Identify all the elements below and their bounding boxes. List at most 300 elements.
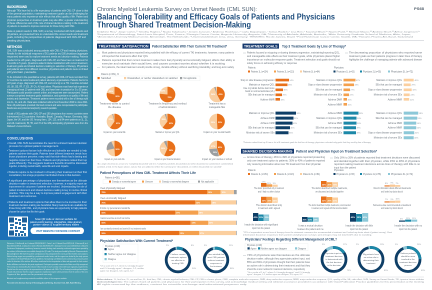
bar chart: patients 1L goals (241, 79, 294, 101)
column chart: described only one and agreed: The doctor described only (256, 204, 283, 207)
legend: physician feelings: Neither agree nor disagree (261, 247, 288, 250)
legend: physicians shared: Physicians 3L (n=72) (391, 173, 413, 176)
text block: goals bullets: treatment goals as their patients progress in later lines of therapy (349, 54, 423, 58)
footnote: physician satisfaction: and 7="strongly agree": disagree, 1-2; neither (100, 267, 144, 270)
column chart: someone else recommended: 7% (385, 199, 388, 201)
section header: treatment goals: TREATMENT GOALS (244, 44, 278, 48)
stacked bar: emotionally fatigued: 70% (102, 202, 106, 204)
bar chart: patients 2L goals: SEs that can be managed (316, 89, 343, 92)
column chart: asked my doctor (373, 183, 412, 193)
donut: patients role: My patients have (363, 253, 380, 256)
bar chart: physicians 2L goals: SEs that can be managed (316, 127, 343, 130)
bar chart: physicians 3L goals: Maintain or improve QOL (376, 112, 403, 115)
donut: patients role (356, 244, 388, 273)
donut: patients should be more involved (395, 244, 425, 273)
section header: shared decision-making: Patient and Physician Input on Treatment Selection* (296, 149, 378, 153)
bar chart: physicians 3L goals: Stop or slow disease progression (368, 132, 403, 135)
text block: physician feelings bullet: 74% of physicians saw themselves as the ultimate (247, 253, 311, 257)
column chart: decided together: we discussed and decided together (316, 190, 344, 193)
stacked bar: physically fatigued: I feel physically fatigued (100, 187, 126, 190)
legend: physicians shared (334, 169, 413, 176)
text block: references: Reused with permission from the congress organizers; reproduction requires written permission from the authors of this work. (7, 271, 88, 274)
text block: methods: ≥18 years of age, diagnosed with CML-CP, and currently on a TKI. Countries included (7, 81, 88, 85)
text block: conclusions: goals differently. This suggests treatment benefits should be discussed (9, 161, 87, 165)
text block: references: Author affiliations are listed on the poster supplement. Participants provided consent and all data were fully anonymized. (7, 263, 88, 266)
text block: authors: ¹Department of Hematology, Saint-Louis Hospital, Paris, France; ²Georgia Cancer Center, Augusta University, Augusta, GA; ³University of Adelaide, Adelaide, Australia; ⁴Akita University Graduate School of Medicine, Akita, Japan; (97, 33, 412, 36)
text block: conclusions: decision-maker in treatment selection; however, a majority report an (9, 182, 87, 186)
bar chart: patients 2L goals: 43% (354, 85, 359, 87)
bar chart: patients 2L goals (308, 79, 360, 106)
column chart: only one treatment presented: 11% (267, 183, 271, 185)
donut: patients role: treatment (367, 262, 376, 265)
column chart: no input from patient: I made the decision with no (394, 225, 423, 228)
pie chart: manageable side effects: 54% (211, 93, 215, 96)
legend: physician feelings: Physicians (n=180) (247, 244, 262, 247)
stacked bar: personal and social life: 17% (176, 212, 180, 214)
panel: treatment goals (241, 44, 423, 144)
bar chart: physicians 1L goals (246, 112, 301, 135)
column chart: mutual decision (298, 217, 324, 231)
legend: satisfaction: Satisfied (101, 77, 112, 80)
footer: abbreviations: Abbreviations: 1L, first line; 2L, second line; 3L, third line; CML, chronic myeloid leukemia; CML-CP, CML in chronic phase; CMR, complete molecular response; DMR, deep molecular response; MMR, major molecular response; QOL, quality of life; SE, side effect; SUN, Survey on Unmet Needs; TKI, tyrosine kinase inhibitor (97, 278, 424, 281)
footer: abbreviations (97, 277, 425, 286)
legend: physician satisfaction: Disagree (108, 258, 117, 261)
donut: satisfied with efficacy: 2% (166, 245, 169, 247)
bar chart: patients 3L goals: SEs that can be managed (376, 84, 403, 87)
text block: methods: surveys comprised treatment goals, satisfaction, and questions on quality of life and (7, 94, 88, 98)
text block: goals bullets: and manageable side effects as their treatment goals, while physicians placed higher (247, 54, 340, 58)
title (97, 7, 336, 29)
bar chart: physicians 2L goals (314, 112, 363, 135)
bar chart: patients 3L goals: Achieve MMR (388, 98, 402, 101)
stacked bar: stressed and worried: 58% (102, 233, 106, 235)
column chart: only one treatment presented: The doctor prescribed only 1 treatment (254, 187, 284, 190)
text block: goals bullets: solely focus on achieving efficacy or response (247, 61, 297, 65)
text block: conclusions: those living with CML, and physicians have an opportunity to help patients (9, 206, 88, 210)
legend: physician satisfaction (103, 244, 138, 262)
bar chart: physicians 3L goals: 50% (417, 123, 421, 125)
donut: satisfied with tolerability: first instance (210, 265, 223, 268)
text block: conclusions: • A significant percentage of physicians see themselves as the ultimate (7, 178, 87, 182)
pie chart: impact on your mental health: Impact on your mental health (204, 131, 231, 134)
column chart: only one treatment presented: 9% (273, 183, 276, 185)
text block: background: many patients who experience side effects that affect quality of life. Patient and (7, 15, 88, 19)
text block: references: Abstract and supplementary materials available online at the congress website. (7, 277, 67, 280)
text block: background (7, 8, 88, 42)
panel: physician feelings (243, 238, 425, 276)
section header: shared decision-making: SHARED DECISION-MAKING (242, 149, 293, 153)
donut: patients should be more involved: involved in the (401, 258, 415, 261)
text block: references: Copies of this poster are for personal use only. (7, 273, 53, 276)
text block: conclusions: treatment decision-making are beneficial. Many treatments are available for (9, 203, 87, 207)
footer: abbreviations: Acknowledgments: The authors thank all patients and physicians for their participation in this survey, and acknowledge medical writing and editorial assistance provided in accordance with Good Publication Practice guidelines for this presentation at the meeting (97, 280, 425, 283)
stacked bar: emotionally fatigued: I feel emotionally fatigued (100, 197, 127, 200)
stacked bar: exercise: I cannot exercise as much as before (100, 217, 131, 220)
bar chart: physicians 1L goals: Maintain or improve QOL (249, 112, 275, 115)
legend: patients by line (248, 67, 320, 74)
bar chart: patients 1L goals: 48% (288, 85, 292, 87)
legend: satisfaction (97, 73, 200, 81)
text block: goals bullets: importance on molecular response goals. Treatment selection and goals should not (247, 58, 340, 62)
column chart: no input from patient: 6% (400, 218, 403, 220)
legend: perceptions: Strongly or somewhat disagree (162, 180, 190, 184)
section header: shared decision-making (241, 149, 378, 154)
poster number: PS68 (414, 7, 424, 11)
text block: background: physician perspectives on treatment goals may also differ; a greater understanding (7, 18, 88, 22)
column chart: recommended and agreed: 32% (322, 200, 326, 202)
column chart: only one treatment presented: 17% (262, 182, 266, 184)
stacked bar: stressed and worried: 27% (200, 233, 204, 235)
pie chart: impact on your studies or school: 28% (213, 152, 217, 154)
text block: conclusions: negative impact on their lives. Patients and physicians ranked their top (9, 158, 87, 162)
bar chart: physicians 3L goals: 50% (417, 128, 421, 130)
text block: references: in accordance with Good Publication Practice guidelines. Survey design and fieldwork were carried out by a research partner (7, 258, 88, 261)
bar chart: physicians 1L goals: SEs that can be managed (248, 127, 275, 130)
donut: ultimate decision maker: 74% (347, 270, 351, 272)
text block: physician feelings bullet: an active role in determining their treatment and that they (247, 264, 311, 268)
column chart: asked my doctor: 7% (396, 183, 399, 185)
text block: QR instructions: poster videos & supplementary slides (33, 223, 80, 227)
stacked bar: stressed and worried: 15% (180, 233, 184, 235)
footnote: shared decision-making: *12% of respondents across lines of therapy chose the statement: someone else recommended a treatment and I asked my doctor about it (patient survey). Chart (243, 231, 392, 234)
panel: treatment satisfaction (97, 44, 235, 169)
column chart: significant input from patient: 33% (264, 217, 269, 219)
column chart: described only one and agreed: 30% (267, 200, 272, 202)
column chart: no input from patient: 11% (412, 218, 416, 220)
bar chart: physicians 2L goals: 58% (359, 113, 363, 115)
donut: satisfied with tolerability: achieve treatment (208, 259, 225, 262)
column chart: mutual decision: 26% (302, 220, 307, 222)
donut: satisfied with efficacy (165, 245, 196, 273)
text block: physician feelings bullet: 85% and 69% of physicians thought that their patients have (247, 260, 310, 264)
legend: physicians shared: Physicians: (334, 169, 344, 172)
text block: background: Data on patient needs in CML SUN, a survey conducted with both patients and (7, 29, 88, 33)
column chart: described only one and agreed (256, 197, 283, 210)
bar chart: physicians 2L goals: Minimize risk of severe SEs (314, 132, 343, 135)
stacked bar: exercise: 20% (209, 223, 213, 225)
pie chart: impact on your financial situation: 58% (169, 150, 173, 152)
bar chart: physicians 1L goals: 40% (290, 128, 295, 130)
pie chart: impact on your social life: Impact on your social life (104, 131, 126, 134)
text block: references: Disclosures: Employment, consultancy, honoraria, research funding, stock ownership, and travel support were reported by (7, 247, 89, 250)
text block: conclusions: • Treatment options that are both effective and tolerable are needed to help (7, 148, 87, 152)
bar chart: patients 1L goals: 30% (284, 90, 288, 92)
column chart: little input from patient: input from the patient (350, 228, 368, 231)
text block: goals bullets: The decreasing proportion of physicians who reported same (349, 51, 423, 55)
column chart: decided together: 16% (333, 184, 337, 186)
pie chart: treatment works to control the disease: 80% (116, 96, 120, 98)
column chart: recommended and agreed: The doctor described multiple treatments, recommended (308, 204, 351, 207)
pie chart: impact on your studies or school: 27% (211, 146, 215, 148)
title: Through Shared Treatment Decision-Making (97, 20, 251, 29)
stacked bar: stressed and worried: I am constantly stressed and worried if my treatment works (100, 227, 147, 230)
text block: QR instructions (30, 217, 82, 227)
text block: references: the authors; full disclosures are available through the QR code. This study was funded by Novartis Pharmaceuticals. (7, 250, 88, 253)
pie chart: manageable side effects: Treatment has a (208, 102, 226, 106)
text block: references: The survey was reviewed by the relevant ethics boards in each country in line with local regulatory requirements. (7, 265, 88, 268)
donut: satisfied with tolerability (203, 245, 234, 273)
pie chart: impact on your social life: 61% (116, 123, 120, 125)
text block: methods (7, 48, 89, 128)
text block: conclusions: • Patients and treatment options that allow them to be involved in their (7, 200, 87, 204)
button: visit website (30, 228, 84, 234)
legend: patients shared: Patients 1L (n=154) (251, 173, 268, 176)
stacked bar: personal and social life: It limits my personal and social life (100, 207, 131, 210)
text block: conclusions: patient involvement and shared decision-making is key in routine clinical (9, 188, 87, 192)
panel: left sidebar (0, 0, 93, 290)
column chart: only one treatment presented (254, 182, 284, 193)
bar chart: patients 2L goals: Stop or slow disease progression (308, 84, 343, 87)
text block: references: Presented at the American Society of Hematology Annual Meeting, December 11-14, 2021, Hybrid Meeting. (7, 282, 81, 284)
column chart: little input from patient: 39% (357, 217, 361, 219)
column chart: little input from patient (345, 213, 374, 231)
bar chart: physicians 1L goals: 58% (296, 113, 301, 115)
pie chart: impact on your work life: Impact on your work life (104, 158, 125, 161)
text block: background: of patients is needed to improve outcomes for those living with CML. (7, 24, 75, 28)
donut: patients should be more involved: 26% (417, 244, 421, 246)
text block: QR instructions: patient-centric learning, infographics, video abstract, (30, 220, 82, 224)
column chart: someone else recommended (373, 199, 411, 210)
legend: physicians by line: Physicians 2L (n=55) (363, 70, 381, 74)
donut: satisfied with efficacy: treatments options (169, 256, 187, 259)
text block: methods: anxiety and depression. Treatment patterns were recorded with a line of therapy split (7, 97, 88, 101)
stacked bar: exercise (100, 217, 237, 225)
heading: conclusions: CONCLUSIONS (7, 136, 33, 140)
bar chart: patients 3L goals: Stop or slow disease progression (368, 89, 403, 92)
donut: patients should be more involved: treatment decision (400, 261, 417, 264)
footnote: shared decision-making: information based on responses from patient and physician surveys; percentages may not total 100% due to rounding. (243, 234, 372, 237)
text block: shared decision bullets: reported making treatment decisions across lines of therapy with little to no (334, 162, 420, 166)
stacked bar: emotionally fatigued (100, 197, 237, 204)
column chart: someone else recommended: and I asked my doctor about it (381, 207, 403, 210)
donut: ultimate decision maker: is determined with (326, 258, 343, 261)
legend: physicians by line: Physicians 3L (n=72) (391, 70, 413, 74)
bar chart: patients 3L goals: 40% (414, 80, 419, 82)
donut: patients should be more involved: 5% (395, 244, 398, 246)
legend: perceptions: Not applicable (201, 180, 215, 184)
donut: satisfied with tolerability: responses in (210, 262, 223, 265)
column chart: mutual decision: 22% (314, 220, 318, 222)
bar chart: physicians 3L goals: SEs that can be managed (376, 117, 403, 120)
text block: conclusions: choose the option that fits their goals. (9, 209, 45, 213)
donut: patients role: 13% (380, 244, 384, 246)
text block: references: Acknowledgments: We thank the patients and physicians who participated in this survey and their families and caregivers. (7, 252, 88, 255)
footer: abbreviations: All rights reserved by the authors; content for scientific exchange and educational purposes only. (97, 283, 248, 286)
text block: references: References: 1. Hochhaus A, et al. Leukemia 2020;34:966-84. 2. Cortes J, et al. J Hematol Oncol 2021;14:44. 3. Baccarani M, et al. (7, 242, 88, 245)
legend: patients by line: Patients 2L (n=123) (277, 70, 294, 74)
bar chart: patients 3L goals: 32% (412, 90, 417, 92)
footnote: goals: *Patients ranked their top 3 from a list of 8 treatment goals for first line of therapy; physicians selected only goals that they rank by line of therapy. (243, 141, 371, 144)
text block: methods: and patients were from different countries; physicians and patients were not linked (7, 67, 88, 71)
column chart: recommended and agreed: 27% (333, 200, 337, 202)
text block: goals bullets: Patients focused on stopping or slowing disease progression, maintaining/improving QOL, (247, 51, 340, 55)
donut: satisfied with tolerability: I am satisfied that (208, 253, 225, 256)
bar chart: physicians 1L goals: Achieve DMR (260, 117, 275, 120)
pie chart: treatment works to control the disease: the disease (108, 106, 122, 109)
pie chart: treatment works to control the disease: Treatment works to control (100, 102, 130, 106)
text block: methods: physician panels. (7, 70, 37, 74)
donut: patients should be more involved: process (404, 264, 412, 267)
text block: methods: and ≥3L treatments; 53, 55, and 72 of the 180 participating physicians were from the (7, 121, 88, 125)
text block: conclusions: treatment and outcomes. (9, 194, 37, 198)
text block: references: under the direction of the authors. All authors contributed to the interpretation of data and approved the final content. (7, 260, 88, 263)
legend: physician satisfaction: Physicians (n=180) (105, 245, 120, 248)
text block: methods: Results were anonymized and analyzed by research specialists. (7, 106, 57, 110)
column chart: decided together: The doctor described multiple treatments, (312, 187, 348, 190)
text block: shared decision bullets: input from the patient (334, 166, 356, 170)
text block: references: Medical writing support was provided by a professional medical writer, and this support was funded by the study sponsor (7, 255, 88, 258)
text block: methods: To be included in the quantitative survey, patients with CML-CP were recruited from (7, 75, 89, 79)
legend: perceptions: Unsure (145, 180, 154, 184)
button: visit website: VISIT WEBSITE FOR MORE CONTENT (36, 229, 80, 233)
column chart: recommended and agreed: 1 treatment, and I agreed with that recommendation (312, 207, 348, 210)
text block: methods: US, UK, DE, FR, IT, ES, JP, CA, AU and others. Physicians must have had experience (7, 84, 88, 88)
column chart: mutual decision: It was a mutual decision (298, 225, 323, 228)
legend: patients by line: Patients: (248, 67, 256, 70)
stacked bar: exercise: 13% (192, 223, 196, 225)
text block: background: Although TKIs have led to a life expectancy of patients with CML-CP close to that (7, 8, 88, 12)
text block: authors: ⁵Amsterdam University Medical Center, Amsterdam, The Netherlands; ⁶Universitätsklinikum Jena, Jena, Germany; ⁷HEMORIO, Rio de Janeiro, Brazil; ⁸Fred Hutchinson Cancer Center, Seattle, WA; ⁹Novartis Pharma AG, Basel, Switzerland (97, 36, 414, 38)
text block: satisfaction bullets (97, 51, 235, 69)
pie chart: impact on your mental health: 50% (218, 122, 222, 124)
section header: treatment satisfaction (97, 44, 228, 49)
bar chart: physicians 3L goals: 53% (418, 118, 422, 120)
stacked bar: physically fatigued: 10% (208, 192, 212, 194)
pie chart: treatment frequency (148, 90, 187, 109)
text block: physician feelings bullet: should be more involved in treatment decisions, respectively (247, 267, 306, 271)
footnote: physician satisfaction: *On a scale of 1 to 7, where 1="strongly disagree" (100, 264, 144, 268)
bar chart: patients 1L goals: back to normal activities (2L) (245, 90, 275, 93)
text block: conclusions: practice. This may be a way to improve patient engagement with their (9, 191, 87, 195)
bar chart: patients 1L goals: Stop or slow disease progression (241, 79, 275, 82)
text block: background: of the general population, maintaining treatment goals can be challenging for (7, 12, 88, 16)
bar chart: physicians 2L goals: 50% (357, 123, 361, 125)
donut: satisfied with efficacy: 8% (191, 245, 194, 247)
pie chart: impact on your mental health: 50% (211, 122, 215, 124)
bar chart: physicians 3L goals: 42% (415, 133, 419, 135)
icon: QR code (8, 216, 28, 236)
column chart: no input from patient: input from the patient (399, 228, 417, 231)
pie chart: impact on your work life (104, 145, 125, 161)
text block: background: of these differences and of the role of shared decision-making in the treatment (7, 21, 88, 25)
bar chart: patients 2L goals: 22% (350, 95, 354, 97)
bar chart: physicians 3L goals: 40% (414, 138, 419, 140)
text block: methods: 3 months to 5 years. Questions asked included satisfaction with current treatment, (7, 61, 88, 65)
donut: ultimate decision maker: 17% (343, 244, 347, 246)
text block: shared decision bullets: Across lines of therapy, 46% to 49% of physicians reported presenting (247, 155, 325, 159)
footnote: physician satisfaction (100, 264, 144, 272)
text block: references: Results from this survey may not be representative of all patients with CML-CP or all treating hematologist/oncologists. (7, 268, 88, 271)
text block: conclusions: • Overall, CML SUN demonstrates the need for a shared treatment decision (7, 141, 87, 145)
pie chart: maintain or improve QOL (156, 118, 180, 134)
bar chart: patients 2L goals: Achieve MMR (328, 103, 342, 106)
bar chart: patients 3L goals: Minimize risk of severe SEs (374, 94, 403, 97)
bar chart: patients 1L goals: Maintain or improve QOL (249, 84, 275, 87)
column chart: recommended and agreed: 29% (327, 200, 332, 202)
text block: methods: interviewed in 12 countries: Australia, Brazil, Canada, France, Germany, Italy, (7, 115, 88, 119)
text block: conclusions (7, 141, 88, 213)
pie chart: impact on your studies or school (202, 145, 232, 161)
column chart: decided together: 26% (322, 184, 326, 186)
bar chart: patients 1L goals: 54% (290, 80, 294, 82)
text block: conclusions: patients achieve their goals. Patients have different treatment needs from (9, 152, 88, 156)
legend: satisfaction: Dissatisfied, or neither dissatisfied nor satisfied (128, 77, 178, 80)
pie chart: manageable side effects: 43% (218, 93, 223, 96)
bar chart: physicians 3L goals: Minimize risk of severe SEs (374, 137, 403, 140)
column chart: little input from patient: I made the decision with little (345, 225, 374, 228)
pie chart: impact on your studies or school: Impact on your studies or school (202, 158, 232, 161)
text block: authors (97, 30, 424, 40)
text block: background: goals, including the perspectives of patients diagnosed with CML-CP and (7, 35, 86, 39)
donut: patients should be more involved: should be more (401, 255, 416, 258)
column chart: decided together: 20% (327, 184, 332, 186)
column chart: described only one and agreed: 30% (262, 200, 266, 202)
text block: methods: 12 countries via social media and patient advocacy organisations. Patients had to be (7, 78, 88, 82)
pie chart: treatment frequency: 22% (161, 90, 165, 92)
column chart: significant input from patient (244, 213, 278, 230)
bar chart: physicians 2L goals: Achieve DMR (328, 122, 342, 125)
text block: satisfaction bullets: still reported that treatments affect their QOL (102, 54, 148, 58)
text block: physician feelings bullet: decision-maker, although they appreciate patient input, and (247, 256, 310, 260)
donut: patients should be more involved: 69% (421, 270, 425, 272)
legend: satisfaction: Patients (n=361), % (101, 73, 120, 76)
text block: methods: needed to be ≥18 years, diagnosed with CML-CP, and have been on treatment for (7, 58, 88, 62)
legend: patients by line: Patients 1L (n=154) (251, 70, 268, 74)
bar chart: physicians 2L goals: Maintain or improve QOL (316, 117, 343, 120)
text block: QR instructions: Scan QR code or visit our website for (35, 217, 77, 221)
legend: perceptions: Strongly or somewhat agree (112, 180, 137, 184)
text block: conclusions: together, including mental health, social life and work impacts. (9, 164, 69, 168)
text block: conclusions: improvement in outcomes if patients are involved. Understanding the role of (9, 185, 87, 189)
text block: references: Blood 2013;122:872-84. 4. Jabbour E, et al. Am J Hematol 2020;95:691-709. 5. Kantarjian H, et al. Cancer 2019;125:3-10. 6. Mauro M. (7, 245, 88, 248)
column chart: little input from patient: 45% (351, 216, 355, 219)
legend: perceptions (103, 176, 218, 184)
donut: ultimate decision maker: in the decision (327, 264, 341, 267)
footnote: satisfaction (97, 163, 233, 169)
pie chart: impact on your mental health (204, 118, 231, 134)
section header: treatment satisfaction: Patient Satisfaction With Their Current TKI Treatment* (152, 44, 228, 48)
column chart: decided together (312, 181, 348, 193)
donut: satisfied with efficacy: treating CML (172, 262, 185, 265)
pie chart: impact on your financial situation: Impact on your financial situation (154, 158, 181, 161)
title: Balancing Tolerability and Efficacy Goals of Patients and Physicians (97, 12, 336, 21)
bar chart: patients 2L goals: 15% (348, 104, 352, 106)
donut: patients role: determining their (363, 259, 379, 262)
legend: patients by line: Patients 3L (n=84) (303, 70, 320, 74)
bar chart: physicians 2L goals: Achieve MMR (328, 112, 342, 115)
bar chart: patients 3L goals: Maintain or improve QOL (376, 79, 403, 82)
bar chart: physicians 1L goals: Achieve CMR (260, 122, 275, 125)
legend: physician feelings: Agree (250, 247, 257, 250)
pie chart: treatment works to control the disease: 20% (109, 91, 113, 93)
text block: goals bullets: highlights the challenge of managing patients with advanced disease (349, 58, 422, 62)
bar chart: physicians 3L goals: Achieve DMR (388, 122, 402, 125)
pie chart: impact on your social life: 37% (108, 119, 113, 121)
section header: treatment goals: Top 3 Treatment Goals by Line of Therapy* (282, 44, 347, 48)
donut: ultimate decision maker (321, 244, 351, 273)
panel: patient perceptions (100, 171, 237, 235)
bar chart: patients 2L goals: Minimize risk of severe SEs (314, 94, 343, 97)
text block: methods: into 1L, 2L, and ≥3L. Data were collected online from November 2020 to June 2021. (7, 100, 88, 104)
stacked bar: personal and social life: 55% (102, 212, 106, 214)
stacked bar: physically fatigued: 78% (102, 192, 106, 194)
legend: physician feelings: Disagree (298, 247, 307, 250)
text block: satisfaction bullets: For patients, the ideal treatment would provide strong, durable efficacy without sacrificing tolerability, and long-term safety (102, 65, 235, 69)
pie chart: manageable side effects: manageable SEs (209, 106, 226, 109)
pie chart: impact on your social life (104, 118, 126, 134)
donut: ultimate decision maker: the last decision (327, 261, 342, 264)
bar chart: patients 2L goals: Achieve DMR (328, 98, 342, 101)
